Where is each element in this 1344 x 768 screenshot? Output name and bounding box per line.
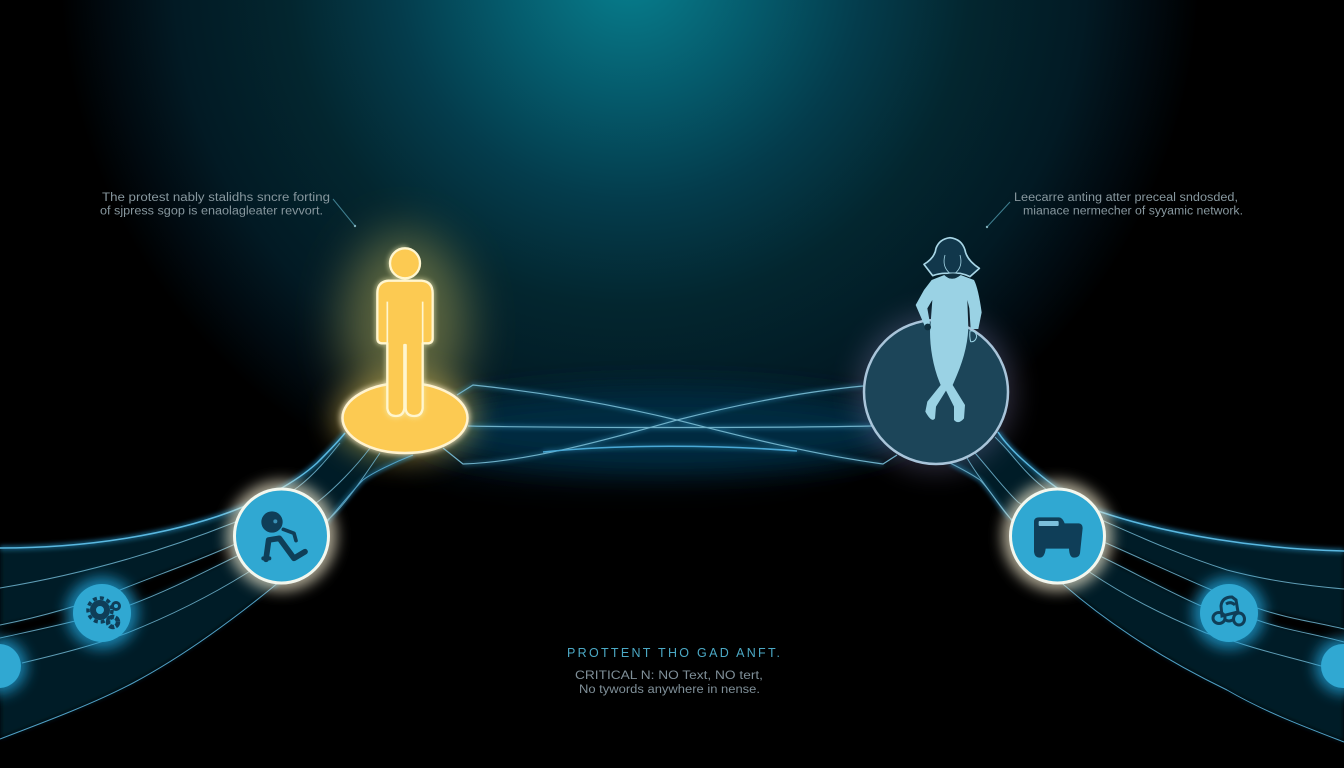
standing person icon xyxy=(377,248,433,416)
node: right edge partial xyxy=(1315,638,1344,694)
left caption: of sjpress sgop is enaolagleater revvort. xyxy=(100,206,323,218)
crossed-leg person icon xyxy=(916,238,982,422)
right network band haze xyxy=(950,432,1344,742)
bottom note: No tywords anywhere in nense. xyxy=(579,684,760,696)
right caption xyxy=(1014,192,1243,218)
blue figure on disc xyxy=(864,238,1008,464)
left network lines xyxy=(0,433,413,739)
left network band haze xyxy=(0,433,413,739)
glow behind blue figure disc xyxy=(858,314,1014,470)
left caption: The protest nably stalidhs sncre forting xyxy=(102,192,330,204)
right caption: Leecarre anting atter preceal sndosded, xyxy=(1014,192,1238,204)
disc xyxy=(864,320,1008,464)
bottom note: CRITICAL N: NO Text, NO tert, xyxy=(575,670,763,682)
icon: running person xyxy=(261,511,305,559)
node: folder xyxy=(1002,481,1112,591)
glow behind yellow figure xyxy=(333,233,477,460)
right callout leader xyxy=(986,202,1010,228)
left callout leader xyxy=(333,199,356,227)
central connecting lines xyxy=(443,385,897,464)
right network lines xyxy=(950,432,1344,742)
yellow figure on disc xyxy=(340,248,470,455)
node: running person xyxy=(226,481,336,591)
icon: folder xyxy=(1034,517,1083,558)
icon: vehicle xyxy=(1213,597,1244,625)
disc xyxy=(340,381,470,455)
node: left edge partial xyxy=(0,638,27,694)
right caption: mianace nermecher of syyamic network. xyxy=(1023,206,1243,218)
icon: gears xyxy=(88,598,120,627)
bottom note xyxy=(575,670,763,696)
left caption xyxy=(100,192,330,218)
node: gears xyxy=(66,577,138,649)
bottom heading: PROTTENT THO GAD ANFT. xyxy=(567,646,780,660)
node: vehicle xyxy=(1193,577,1265,649)
